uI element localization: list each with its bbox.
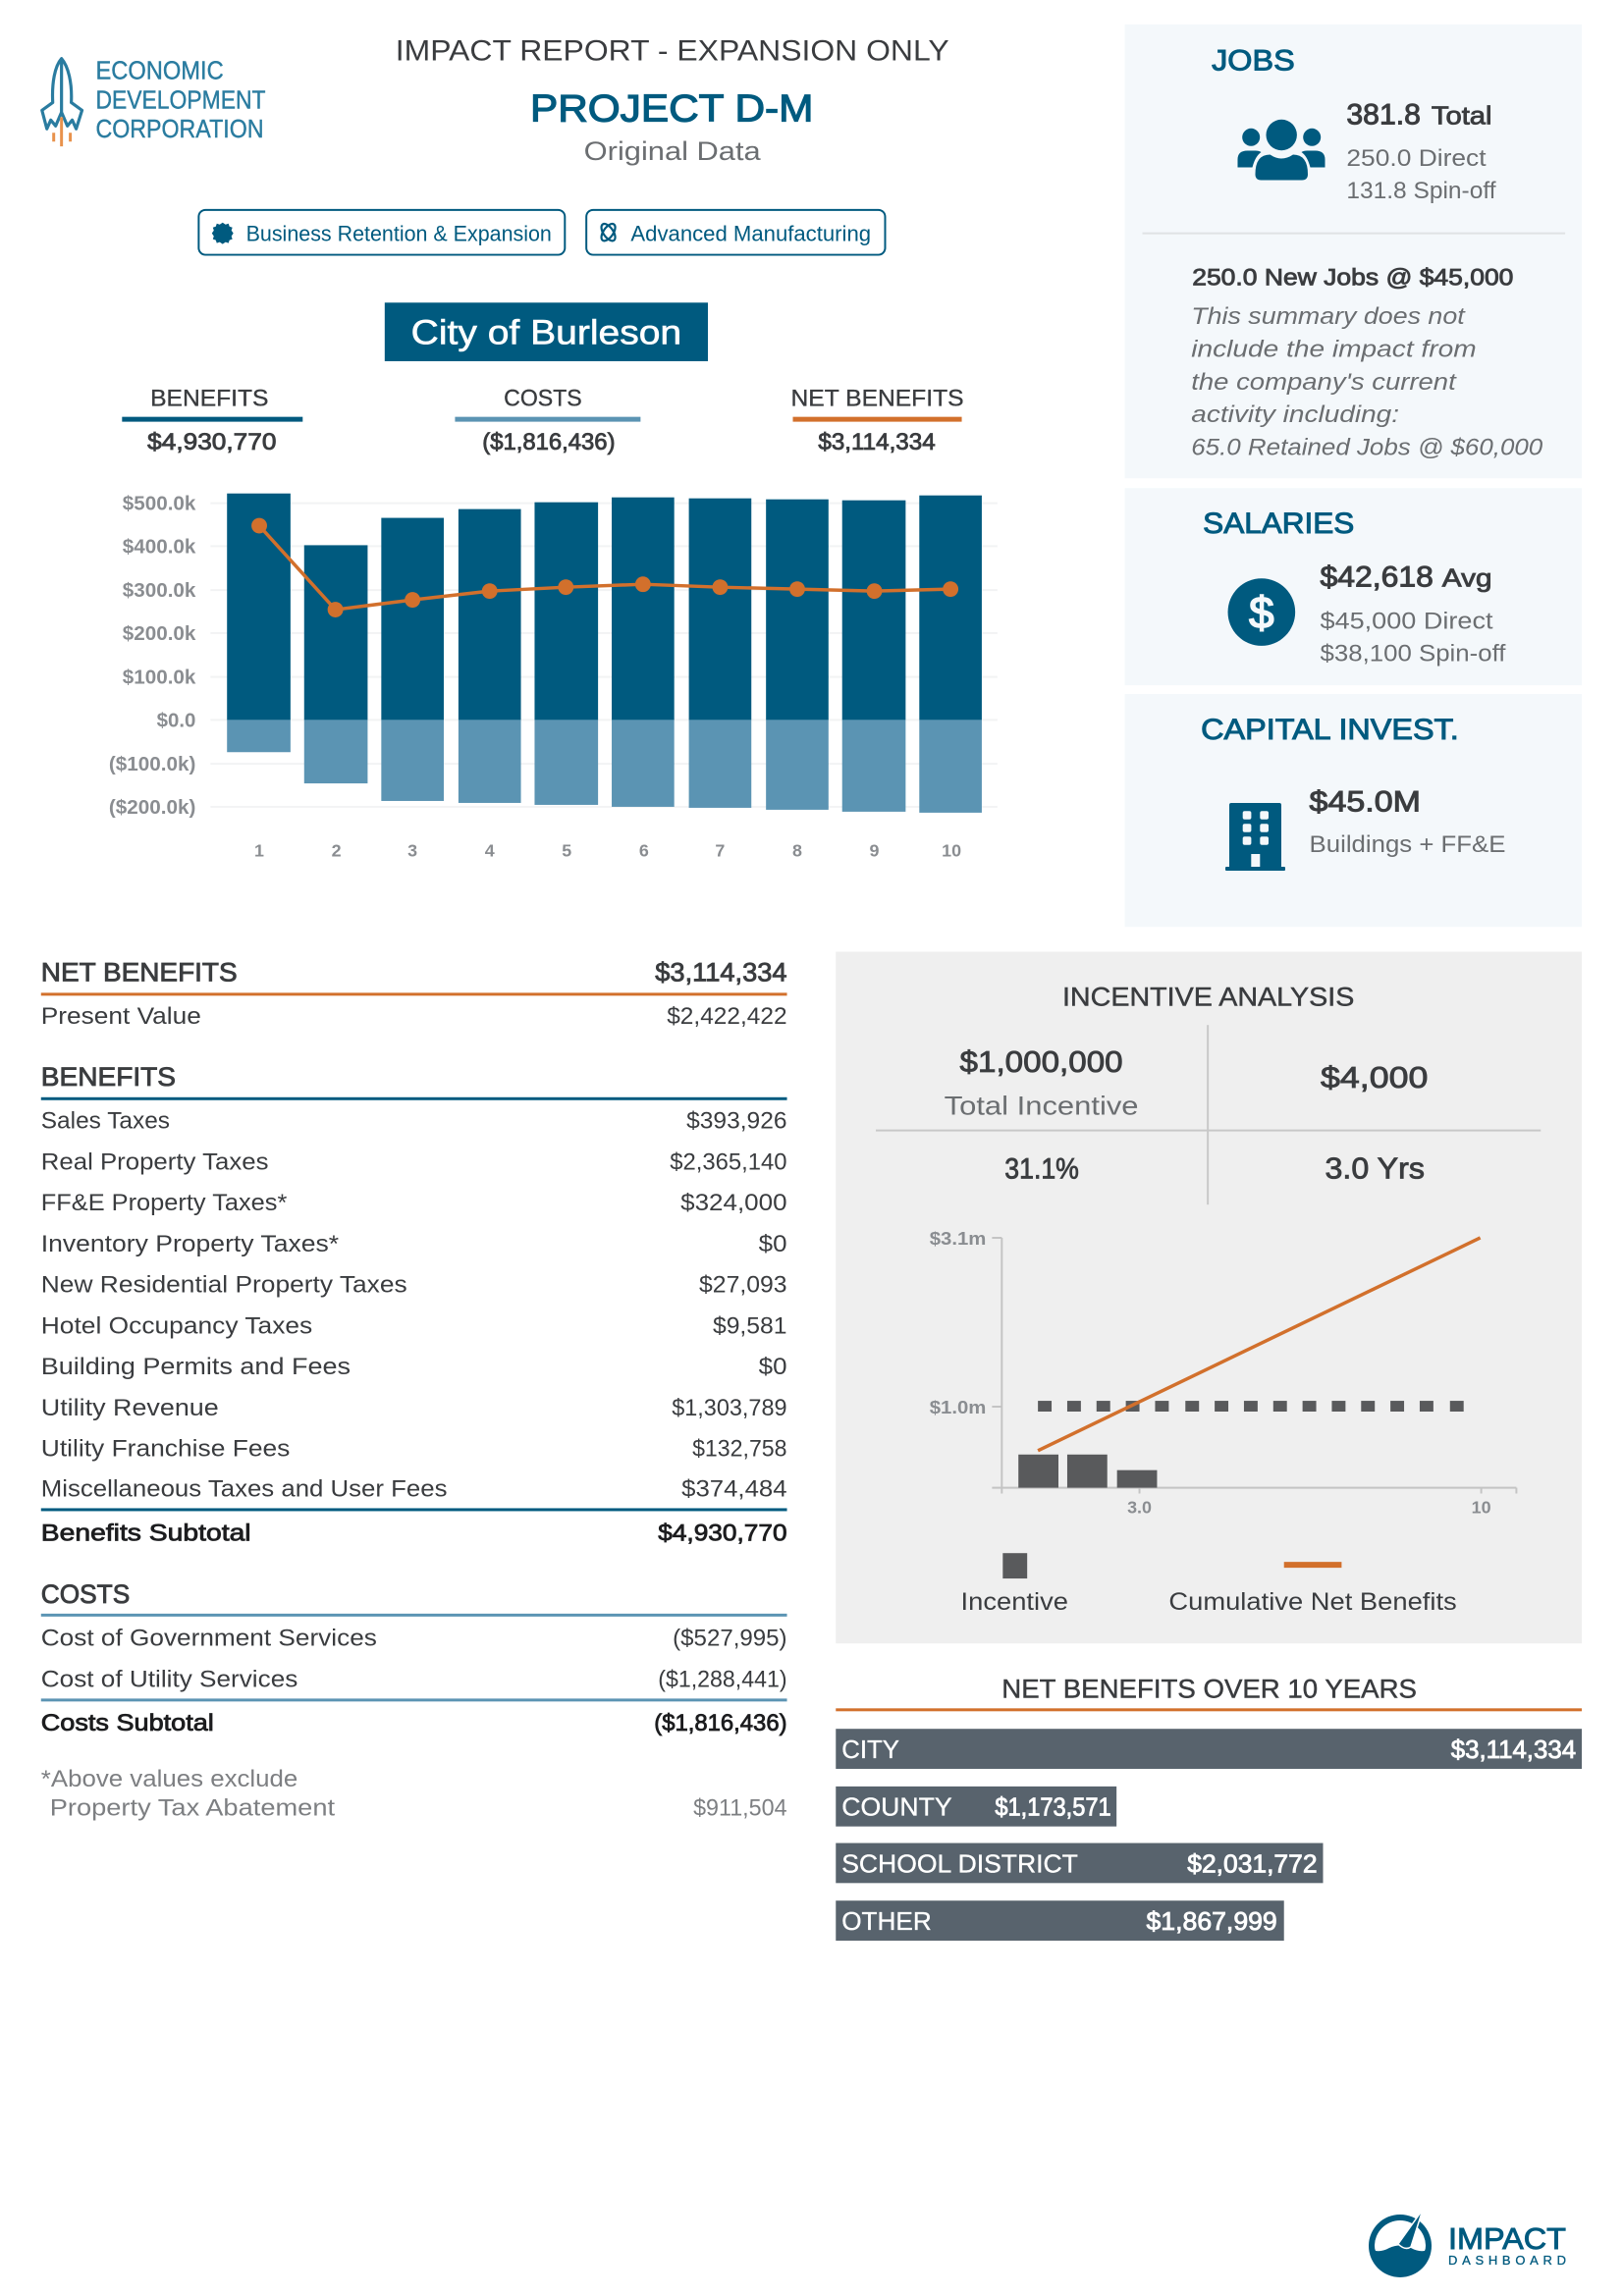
- footnote: tax abatement: [41, 1766, 787, 1822]
- x axis labels: 4: [485, 841, 495, 861]
- footnote: tax abatement: $911,504: [693, 1795, 787, 1822]
- text: summary note: the company's current: [1191, 369, 1457, 396]
- summary: benefits: BENEFITS: [150, 386, 268, 412]
- chart: annual benefits, costs and net benefits: [109, 494, 998, 861]
- bar: other: $1,867,999: [1147, 1908, 1277, 1936]
- bar: other: [836, 1900, 1284, 1941]
- benefit bars: [227, 494, 982, 720]
- summary: benefits: $4,930,770: [147, 429, 276, 455]
- table: benefits: $4,930,770: [658, 1520, 787, 1546]
- chart: incentive vs cumulative net benefits: $1.0m: [930, 1398, 986, 1418]
- bar: county: COUNTY: [841, 1794, 952, 1822]
- icon: dollar: [1228, 578, 1295, 646]
- tag: advanced manufacturing: [586, 210, 885, 255]
- summary: costs: [455, 386, 640, 455]
- y axis labels: $100.0k: [123, 667, 196, 689]
- table: benefits: $374,484: [681, 1476, 787, 1503]
- table: benefits: Utility Revenue: [41, 1395, 219, 1421]
- bar: school district: [836, 1843, 1324, 1883]
- icon: atom: [599, 222, 618, 243]
- table: net benefits: $3,114,334: [655, 957, 787, 987]
- summary: net benefits: $3,114,334: [818, 429, 936, 455]
- table: costs: ($1,288,441): [658, 1666, 787, 1692]
- x axis labels: 2: [332, 841, 342, 861]
- x axis labels: 8: [792, 841, 802, 861]
- table: benefits: $1,303,789: [672, 1395, 787, 1421]
- bar: city: [836, 1729, 1582, 1769]
- y axis labels: ($200.0k): [109, 797, 195, 819]
- legend: cumulative net benefits: Cumulative Net Benefits: [1168, 1588, 1457, 1616]
- table: net benefits: Present Value: [41, 1003, 201, 1030]
- table: benefits: Building Permits and Fees: [41, 1354, 351, 1380]
- heading: project name: PROJECT D-M: [530, 87, 813, 130]
- logo: economic development corporation: [42, 58, 266, 146]
- table: costs: [41, 1579, 787, 1736]
- table: benefits: Hotel Occupancy Taxes: [41, 1312, 312, 1339]
- table: benefits: $0: [759, 1354, 787, 1380]
- panel: salaries: [1125, 488, 1582, 685]
- cumulative line: [1038, 1238, 1481, 1451]
- bar: county: [836, 1787, 1116, 1827]
- cost bars: [227, 720, 982, 813]
- table: benefits: New Residential Property Taxes: [41, 1272, 407, 1299]
- x axis labels: 7: [715, 841, 725, 861]
- metrics grid: $1,000,000: [960, 1044, 1123, 1079]
- x axis labels: 5: [562, 841, 571, 861]
- y axis labels: $200.0k: [123, 623, 196, 645]
- tag: business retention and expansion: [198, 210, 565, 255]
- chart: incentive vs cumulative net benefits: 10: [1472, 1497, 1491, 1517]
- table: benefits: Benefits Subtotal: [41, 1520, 251, 1546]
- summary: costs: COSTS: [504, 386, 582, 412]
- panel: jobs: [1125, 25, 1582, 478]
- metrics grid: Total Incentive: [945, 1092, 1139, 1121]
- table: benefits: $27,093: [699, 1272, 787, 1299]
- table: benefits: [41, 1062, 787, 1546]
- bar: county: $1,173,571: [995, 1794, 1111, 1822]
- heading: city of burleson: [385, 302, 708, 361]
- legend: incentive: Incentive: [961, 1588, 1068, 1616]
- heading: net benefits over 10 years: NET BENEFITS OVER 10 YEARS: [1001, 1674, 1417, 1703]
- text: original data: Original Data: [584, 136, 761, 166]
- panel: capital investment: $45.0M: [1310, 785, 1421, 818]
- chart: incentive vs cumulative net benefits: [930, 1229, 1516, 1517]
- panel: capital investment: Buildings + FF&E: [1310, 831, 1505, 858]
- panel: jobs: 381.8: [1346, 98, 1421, 131]
- logo: impact dashboard: DASHBOARD: [1448, 2253, 1566, 2268]
- table: benefits: BENEFITS: [41, 1062, 176, 1092]
- x axis labels: 6: [639, 841, 649, 861]
- metrics grid: [876, 1025, 1541, 1204]
- panel: jobs: 131.8 Spin-off: [1346, 178, 1496, 204]
- x axis labels: 1: [254, 841, 264, 861]
- table: net benefits: NET BENEFITS: [41, 957, 238, 987]
- heading: jobs: JOBS: [1212, 45, 1295, 78]
- chart: incentive vs cumulative net benefits: 3.0: [1127, 1497, 1152, 1517]
- table: net benefits: [41, 957, 787, 1030]
- heading: city of burleson: City of Burleson: [411, 314, 681, 352]
- panel: salaries: $45,000 Direct: [1321, 608, 1493, 634]
- summary: net benefits: [791, 386, 964, 455]
- metrics grid: 31.1%: [1004, 1152, 1079, 1185]
- table: costs: ($1,816,436): [654, 1710, 787, 1736]
- table: benefits: Inventory Property Taxes*: [41, 1231, 339, 1257]
- table: benefits: Real Property Taxes: [41, 1148, 269, 1175]
- panel: jobs: 250.0 Direct: [1346, 145, 1487, 172]
- table: net benefits: $2,422,422: [667, 1003, 787, 1030]
- summary: costs: ($1,816,436): [482, 429, 616, 455]
- table: benefits: FF&E Property Taxes*: [41, 1190, 287, 1216]
- x axis labels: 3: [407, 841, 417, 861]
- logo: impact dashboard: IMPACT: [1448, 2221, 1566, 2256]
- text: summary note: This summary does not: [1191, 303, 1466, 330]
- icon: building: [1225, 803, 1285, 871]
- x axis labels: 9: [870, 841, 880, 861]
- table: benefits: $132,758: [692, 1436, 787, 1463]
- panel: salaries: Avg: [1442, 565, 1492, 593]
- footnote: tax abatement: *Above values exclude: [41, 1766, 298, 1792]
- panel: salaries: $38,100 Spin-off: [1321, 640, 1506, 667]
- logo: economic development corporation: ECONOMIC: [95, 58, 224, 85]
- logo: impact dashboard: [1369, 2210, 1566, 2277]
- table: benefits: Miscellaneous Taxes and User Fees: [41, 1476, 448, 1503]
- heading: capital invest: CAPITAL INVEST.: [1201, 714, 1459, 746]
- table: costs: COSTS: [41, 1579, 130, 1609]
- legend: cumulative net benefits: [1168, 1562, 1457, 1616]
- icon: badge: [212, 223, 234, 244]
- incentive bars: [1018, 1455, 1157, 1488]
- y axis labels: $500.0k: [123, 494, 196, 515]
- logo: economic development corporation: CORPORATION: [95, 116, 264, 143]
- bar: school district: $2,031,772: [1187, 1850, 1318, 1878]
- panel: jobs: Total: [1432, 102, 1492, 130]
- text: summary note: 65.0 Retained Jobs @ $60,000: [1191, 434, 1543, 460]
- y axis labels: $0.0: [157, 710, 195, 731]
- icon: gauge: [1369, 2210, 1432, 2277]
- legend: incentive: [961, 1553, 1068, 1616]
- y axis labels: $300.0k: [123, 580, 196, 602]
- summary: net benefits: NET BENEFITS: [791, 386, 964, 412]
- y axis labels: $400.0k: [123, 536, 196, 558]
- icon: rocket: [42, 59, 82, 146]
- bar: city: CITY: [841, 1736, 899, 1764]
- table: benefits: Sales Taxes: [41, 1108, 170, 1135]
- total incentive dashed line: [1038, 1401, 1464, 1412]
- logo: economic development corporation: DEVELOPMENT: [95, 86, 266, 114]
- net benefits line: [251, 518, 958, 617]
- heading: report title: IMPACT REPORT - EXPANSION ONLY: [396, 35, 949, 68]
- icon: dollar: $: [1249, 587, 1274, 637]
- metrics grid: 3.0 Yrs: [1325, 1150, 1425, 1185]
- panel: jobs: 250.0 New Jobs @ $45,000: [1192, 264, 1513, 291]
- bar: school district: SCHOOL DISTRICT: [841, 1850, 1078, 1878]
- metrics grid: $4,000: [1321, 1060, 1428, 1095]
- text: summary note: activity including:: [1191, 401, 1399, 428]
- icon: people: [1237, 120, 1325, 181]
- bar: other: OTHER: [841, 1908, 932, 1936]
- heading: incentive analysis: INCENTIVE ANALYSIS: [1062, 982, 1354, 1011]
- x axis labels: [254, 841, 961, 861]
- text: summary note: include the impact from: [1191, 336, 1477, 362]
- panel: salaries: $42,618: [1321, 561, 1434, 594]
- table: benefits: $393,926: [686, 1108, 787, 1135]
- x axis labels: 10: [942, 841, 961, 861]
- panel: capital investment: [1125, 694, 1582, 927]
- text: summary note: [1191, 303, 1543, 460]
- table: costs: ($527,995): [673, 1626, 787, 1652]
- table: costs: Cost of Government Services: [41, 1626, 377, 1652]
- y axis labels: ($100.0k): [109, 754, 195, 775]
- table: benefits: $2,365,140: [670, 1148, 787, 1175]
- heading: salaries: SALARIES: [1203, 507, 1354, 540]
- bar: city: $3,114,334: [1451, 1736, 1576, 1764]
- footnote: tax abatement: Property Tax Abatement: [50, 1795, 336, 1822]
- table: benefits: $0: [759, 1231, 787, 1257]
- table: benefits: $9,581: [713, 1312, 787, 1339]
- table: benefits: Utility Franchise Fees: [41, 1436, 290, 1463]
- summary: benefits: [122, 386, 302, 455]
- y axis labels: [109, 494, 196, 819]
- table: costs: Costs Subtotal: [41, 1710, 214, 1736]
- panel: incentive analysis: [836, 952, 1582, 1643]
- tag: advanced manufacturing: Advanced Manufacturing: [630, 222, 871, 246]
- table: benefits: $324,000: [680, 1190, 787, 1216]
- tag: business retention and expansion: Business Retention & Expansion: [246, 222, 552, 246]
- chart: incentive vs cumulative net benefits: $3.1m: [930, 1229, 986, 1250]
- table: costs: Cost of Utility Services: [41, 1666, 298, 1692]
